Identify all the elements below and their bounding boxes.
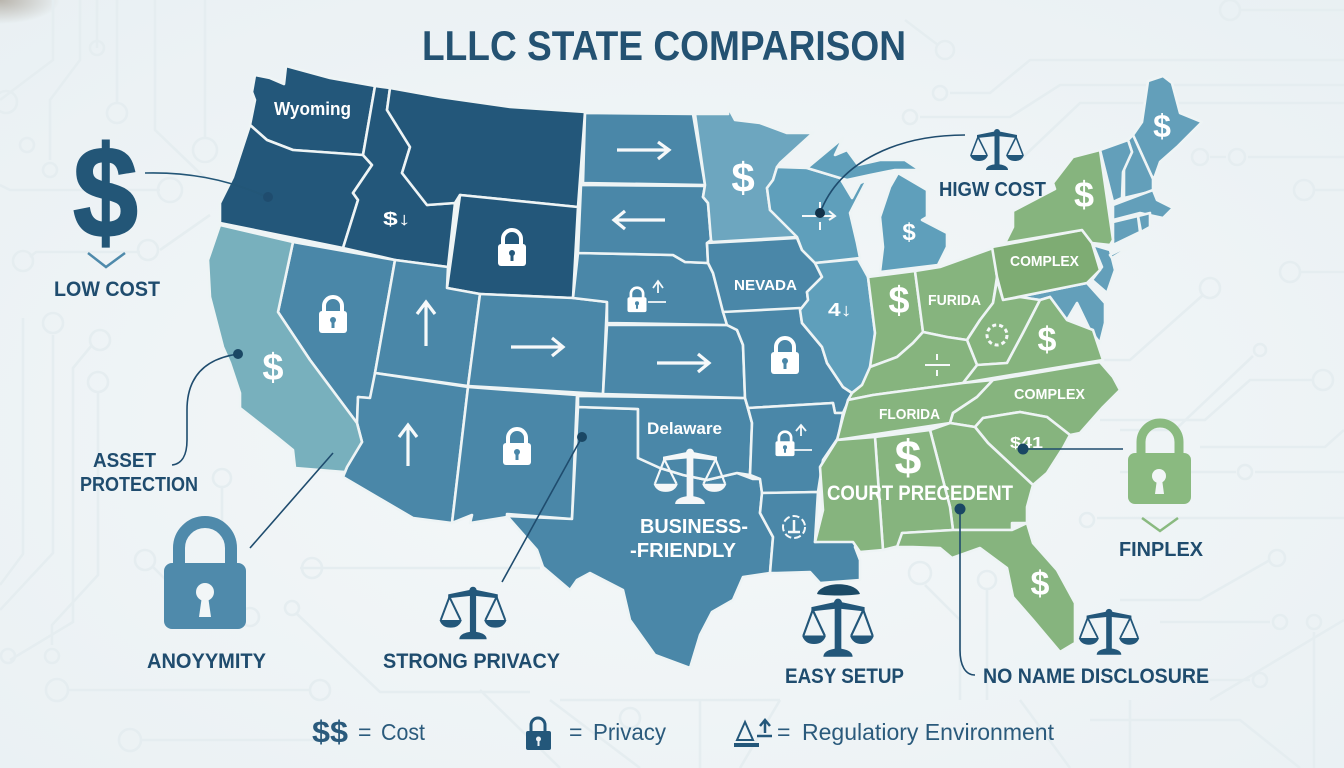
callout: low cost: LOW COST [54, 278, 160, 301]
icon: scales on Texas [654, 449, 726, 504]
state label: Business-Friendly: -FRIENDLY [630, 540, 737, 562]
legend: cost: Cost [381, 719, 426, 745]
callout: asset protection: PROTECTION [80, 474, 198, 496]
state label: 4 down: 4↓ [828, 300, 852, 320]
state label: Furida: FURIDA [928, 292, 981, 309]
state label: Business-Friendly [630, 516, 748, 562]
callout: low cost [54, 119, 273, 301]
legend: cost: $$ [312, 714, 348, 749]
state label: Complex North Carolina: COMPLEX [1014, 386, 1085, 403]
state label: Delaware: Delaware [647, 419, 722, 438]
map region: dark northwest states [220, 66, 585, 298]
legend: privacy: Privacy [593, 719, 666, 745]
icon: large dollar: $ [73, 119, 138, 265]
map icons: white arrows [399, 142, 1007, 538]
callout: asset protection [80, 349, 243, 496]
connector: low cost [145, 173, 267, 197]
callout: asset protection: ASSET [93, 450, 156, 472]
panel: US state map [208, 66, 1202, 668]
callout: anonymity: ANOYYMITY [147, 650, 266, 673]
map icons: dollar signs [262, 108, 1171, 603]
callout: no name disclosure [954, 504, 1209, 688]
state labels [274, 99, 1085, 562]
icon: scales [802, 599, 874, 657]
map region: Minnesota [695, 107, 813, 242]
state label: Florida: FLORIDA [879, 406, 940, 423]
icon: scales [1079, 609, 1139, 655]
state label: dollar down: $↓ [383, 209, 411, 229]
state label: Business-Friendly: BUSINESS- [640, 516, 748, 538]
legend [312, 714, 1055, 750]
legend: privacy [526, 718, 666, 750]
map icons: dollar signs: $ [1153, 108, 1171, 144]
map icons: dollar signs: $ [262, 347, 284, 389]
map icons: dollar signs: $ [895, 432, 922, 485]
callout: finplex: FINPLEX [1119, 539, 1204, 561]
legend: privacy: = [569, 719, 582, 745]
map icons: dollar signs: $ [1038, 321, 1057, 359]
icon: scales [970, 129, 1024, 170]
map icons: dollar signs: $ [1074, 174, 1094, 215]
callout: high cost [815, 129, 1046, 218]
state label: $41: $41 [1010, 435, 1043, 452]
legend: regulatory environment: Regulatiory Environment [802, 719, 1055, 745]
icon: large lock [164, 522, 246, 629]
title: LLLC STATE COMPARISON [422, 22, 906, 69]
callout: easy setup [785, 584, 904, 688]
legend: regulatory environment: = [777, 719, 790, 745]
callout: anonymity [147, 453, 333, 673]
map icons: dollar signs: $ [731, 154, 755, 201]
map region: green northeastern and southern states [815, 150, 1120, 652]
state label: Wyoming: Wyoming [274, 99, 351, 119]
state label: Court Precedent: COURT PRECEDENT [827, 482, 1013, 505]
state label: Nevada: NEVADA [734, 277, 797, 294]
callout: no name disclosure: NO NAME DISCLOSURE [983, 665, 1209, 688]
map icons: dollar signs: $ [888, 280, 910, 322]
map region: New England and mid-Atlantic [1003, 76, 1202, 343]
map region: upper midwest states [767, 138, 947, 393]
map icons: dollar signs: $ [1031, 565, 1050, 603]
callout: easy setup: EASY SETUP [785, 665, 904, 688]
legend: cost [312, 714, 426, 749]
callout: finplex [1018, 423, 1204, 561]
map icons: white locks [319, 230, 799, 465]
legend: cost: = [358, 719, 371, 745]
callout: strong privacy: STRONG PRIVACY [383, 650, 560, 673]
map region: California [208, 225, 362, 472]
icon: scales [440, 587, 506, 639]
state label: Complex Pennsylvania: COMPLEX [1010, 253, 1079, 270]
icon: green lock [1128, 423, 1191, 504]
map icons: dollar signs: $ [902, 219, 916, 246]
callout: high cost: HIGW COST [939, 179, 1046, 201]
map region: western and plains states [278, 113, 860, 668]
callout: strong privacy [383, 432, 587, 673]
